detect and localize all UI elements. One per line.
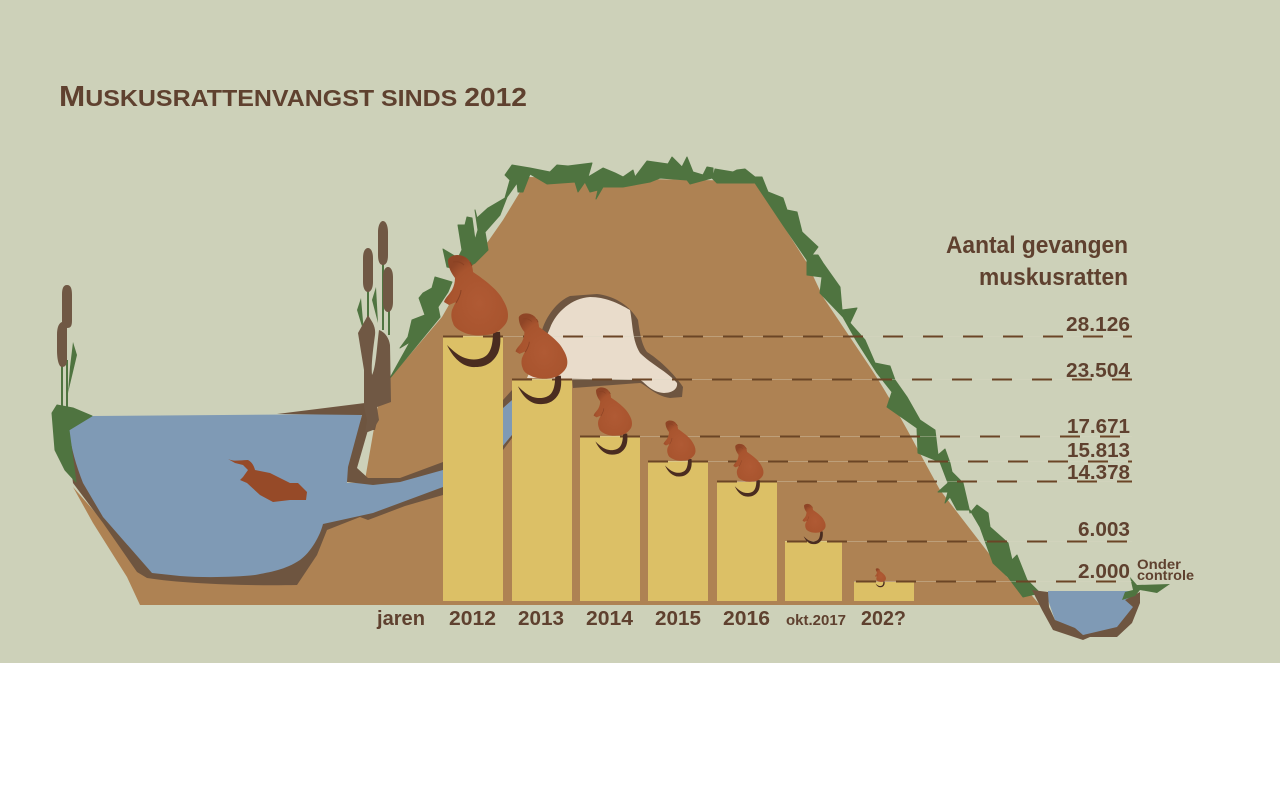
values heading: Aantal gevangen <box>946 232 1128 259</box>
left bank vegetation <box>52 405 92 482</box>
bar 2016 <box>717 482 777 601</box>
left cattails <box>57 285 77 410</box>
values heading <box>946 232 1128 291</box>
year 2015: 2015 <box>655 608 701 630</box>
bar 2013 <box>512 379 572 601</box>
vegetation lower left slope <box>390 277 452 378</box>
vegetation top and right <box>443 157 1040 597</box>
year 2012: 2012 <box>449 608 496 630</box>
axis label jaren: jaren <box>376 608 425 630</box>
dashed value lines <box>443 336 1132 582</box>
pond vegetation <box>1122 577 1170 600</box>
burrow outline <box>542 294 683 398</box>
rat on bar 2014 <box>594 387 632 455</box>
cattail heads <box>57 285 72 367</box>
burrow chamber <box>527 297 677 393</box>
label onder controle <box>1137 556 1194 583</box>
bar 202? <box>854 582 914 601</box>
cross-section landscape <box>52 157 1170 640</box>
label onder controle: Onder <box>1137 556 1182 572</box>
swimming muskrat <box>228 459 307 502</box>
right pond <box>1032 577 1170 640</box>
bar okt. 2017 <box>785 541 842 601</box>
reed leaf <box>68 342 77 393</box>
ditch water <box>69 400 512 577</box>
rat on bar 2015 <box>664 420 696 477</box>
year 2016: 2016 <box>723 608 770 630</box>
right cattails <box>357 221 393 335</box>
rat on bar 2013 <box>516 313 567 404</box>
year 202?: 202? <box>861 608 906 630</box>
value 23.504: 23.504 <box>1066 359 1131 382</box>
value 28.126: 28.126 <box>1066 313 1130 336</box>
cattail heads <box>363 221 393 312</box>
rat on bar 2016 <box>733 444 763 497</box>
bar 2014 <box>580 436 640 601</box>
value 17.671: 17.671 <box>1067 415 1130 438</box>
value 6.003: 6.003 <box>1078 518 1130 541</box>
bar 2012 <box>443 336 503 601</box>
rat on bar 2012 <box>444 255 508 367</box>
mud bank under right cattails <box>358 315 391 433</box>
rat on bar okt. 2017 <box>803 504 826 544</box>
pond water <box>1048 591 1135 635</box>
bar 2015 <box>648 461 708 601</box>
label onder controle: controle <box>1137 567 1194 583</box>
left water mud bank <box>66 432 443 585</box>
value 15.813: 15.813 <box>1067 439 1130 462</box>
bar chart <box>443 336 914 601</box>
mud channel lower edge <box>502 435 512 450</box>
value 14.378: 14.378 <box>1067 461 1130 484</box>
year okt.2017: okt.2017 <box>786 613 846 629</box>
year 2014: 2014 <box>586 608 634 630</box>
year 2013: 2013 <box>518 608 564 630</box>
earth dike <box>73 177 1040 605</box>
title: MUSKUSRATTENVANGST SINDS 2012 <box>59 81 527 113</box>
reed leaves <box>357 287 378 333</box>
pond mud <box>1032 590 1140 640</box>
rat on bar 202? <box>875 568 886 587</box>
value 2.000: 2.000 <box>1078 560 1130 583</box>
values heading: muskusratten <box>979 264 1128 291</box>
mud channel edges <box>277 390 512 485</box>
